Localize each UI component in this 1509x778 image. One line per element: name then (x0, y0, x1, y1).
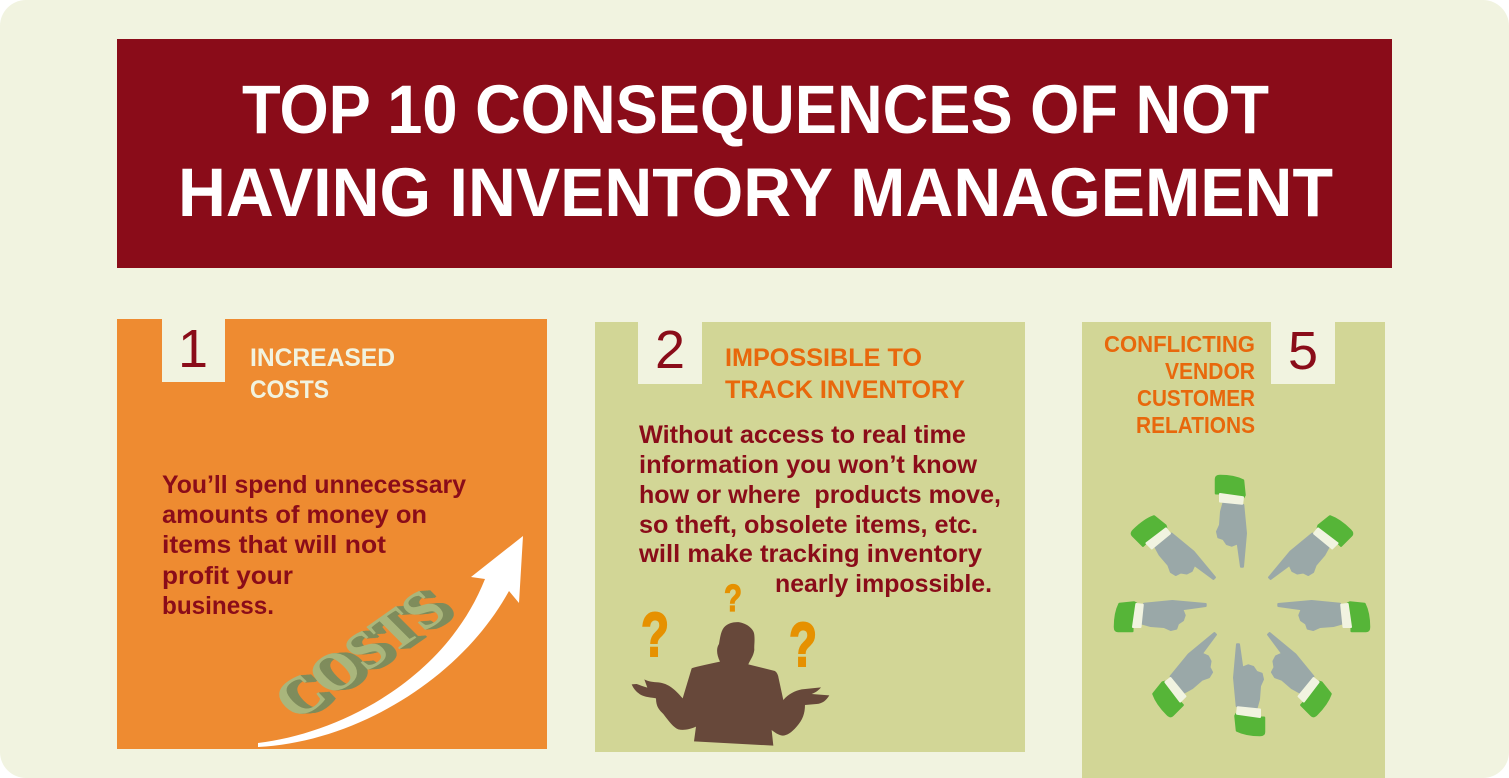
text block: tracking description: information you won’t know (639, 451, 978, 479)
hand pointing from left (1115, 601, 1206, 631)
icon: question marks: ? (789, 611, 817, 680)
hand pointing from right (1278, 601, 1369, 631)
heading: conflicting vendor customer relations: CUSTOMER (1137, 385, 1255, 411)
number badge 1: 1 (178, 319, 208, 379)
text block: tracking description (638, 421, 1001, 598)
panel: increased costs (117, 319, 547, 749)
icon: circle of pointing hands (1115, 476, 1369, 735)
text block: costs description: amounts of money on (162, 501, 427, 529)
icon: rising arrow (258, 536, 523, 747)
heading: impossible to track inventory (725, 344, 965, 404)
icon: 3D costs lettering: COSTS (260, 578, 459, 731)
panel: impossible to track inventory (595, 320, 1025, 752)
hand pointing from top (1216, 476, 1246, 567)
number badge 2: 2 (655, 320, 685, 380)
heading: conflicting vendor customer relations (1104, 331, 1255, 438)
heading: conflicting vendor customer relations: RELATIONS (1136, 412, 1255, 438)
heading: impossible to track inventory: TRACK INVENTORY (725, 376, 965, 404)
heading: impossible to track inventory: IMPOSSIBLE TO (725, 344, 922, 372)
title banner (117, 39, 1392, 268)
number badge 1 (162, 319, 225, 382)
text block: costs description: items that will not (162, 531, 387, 559)
hand pointing from top left (1131, 511, 1217, 598)
heading: conflicting vendor customer relations: CONFLICTING (1104, 331, 1255, 357)
title banner: HAVING INVENTORY MANAGEMENT (178, 154, 1333, 231)
text block: tracking description: nearly impossible. (775, 570, 992, 598)
title banner: TOP 10 CONSEQUENCES OF NOT (242, 71, 1269, 148)
text block: costs description: business. (162, 592, 274, 620)
number badge 5: 5 (1288, 321, 1318, 381)
text block: costs description: You’ll spend unnecessary (162, 471, 466, 499)
icon: shrugging man (632, 622, 829, 746)
number badge 5 (1271, 321, 1335, 384)
heading: increased costs: INCREASED (250, 344, 395, 372)
icon: question marks: ? (641, 601, 669, 670)
hand pointing from bottom left (1148, 631, 1235, 717)
text block: tracking description: Without access to real time (639, 421, 966, 449)
number badge 2 (638, 320, 702, 384)
text block: tracking description: will make tracking inventory (638, 540, 982, 568)
text block: costs description: profit your (162, 562, 293, 590)
text block: costs description (162, 471, 466, 620)
heading: conflicting vendor customer relations: VENDOR (1165, 358, 1255, 384)
hand pointing from bottom (1234, 644, 1264, 735)
hand pointing from top right (1267, 511, 1353, 598)
icon: question marks: ? (724, 578, 742, 620)
heading: increased costs: COSTS (250, 376, 329, 404)
panel: conflicting vendor customer relations (1082, 321, 1385, 778)
heading: increased costs (250, 344, 395, 404)
text block: tracking description: so theft, obsolete items, etc. (639, 511, 978, 539)
hand pointing from bottom right (1249, 631, 1336, 717)
text block: tracking description: how or where products move, (639, 481, 1001, 509)
icon: question marks (641, 578, 817, 680)
